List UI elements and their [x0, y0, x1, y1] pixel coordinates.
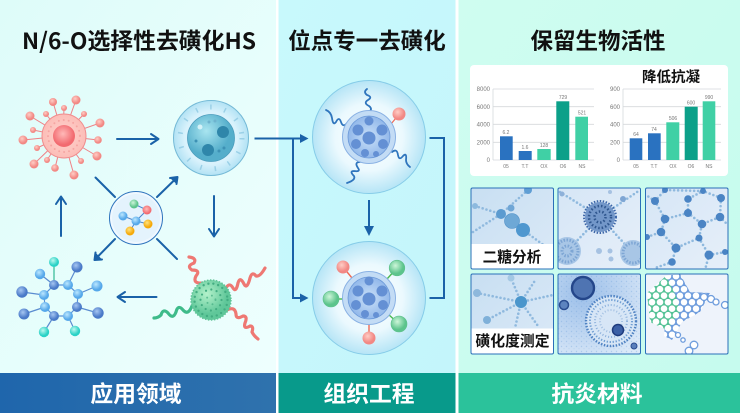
- bar chart: right: 506: [669, 116, 677, 122]
- image tile: bubble network: [646, 274, 728, 355]
- image tile: spiky particles: [553, 188, 646, 269]
- bar chart: left: 521: [578, 110, 586, 116]
- icon: lower cell with ligands: [312, 242, 426, 354]
- arrow: upper to lower cell: [364, 200, 374, 236]
- bar chart: left: OX: [540, 164, 548, 170]
- bar chart: right: O6: [688, 164, 695, 170]
- bar chart: right: 990: [705, 95, 713, 101]
- bar chart: left: 6.2: [503, 130, 510, 136]
- bar chart: left: 8000: [477, 87, 491, 93]
- footer band: anti-inflammatory materials: 抗炎材料: [551, 376, 643, 409]
- arrow: right bracket: [430, 138, 444, 298]
- arrow: ribbon cell to molecule: [118, 292, 156, 302]
- icon: central molecule hub: [110, 192, 162, 244]
- bar chart: left: 128: [540, 143, 548, 149]
- chart title: 降低抗凝: [642, 66, 700, 87]
- bar chart: right: T.T: [651, 164, 657, 170]
- bar chart: right: 400: [610, 122, 621, 128]
- icon: blue stem cell: [174, 100, 248, 176]
- bar chart: left: [477, 87, 594, 170]
- panel: middle site-specific: [278, 0, 456, 373]
- bar chart: right: 900: [610, 87, 621, 93]
- image tile: disaccharide analysis: [471, 186, 554, 269]
- bar chart: left: NS: [579, 164, 586, 170]
- arrow: red cell to stem cell: [117, 134, 158, 144]
- bar chart: right: 600: [610, 105, 621, 111]
- icon: upper cell with chains: [312, 80, 426, 194]
- icon: blue branched molecule: [16, 257, 104, 337]
- arrow: hub to molecule: [94, 239, 115, 260]
- footer band: anti-inflammatory materials: [458, 373, 740, 413]
- bar chart: left: 2000: [477, 140, 491, 146]
- bar chart: right: [610, 87, 721, 170]
- icon: red spiky cell: [18, 96, 104, 180]
- footer band: tissue engineering: [278, 373, 456, 413]
- icon: green virus with ribbons: [154, 257, 265, 339]
- bar chart: left: 0: [487, 158, 491, 164]
- footer band: applications: [0, 373, 276, 413]
- bar chart: left: T.T: [522, 164, 528, 170]
- tile label: 磺化度测定: [476, 330, 550, 351]
- tile label: 二糖分析: [483, 246, 542, 267]
- bar chart: right: 0: [617, 158, 621, 164]
- arrow: link top-left: [96, 178, 115, 197]
- arrow: link bottom-right: [157, 239, 177, 259]
- image tile: hexagonal network: [644, 187, 728, 270]
- bar chart: right: OX: [669, 164, 677, 170]
- image tile: stained vesicles: [558, 274, 640, 354]
- bar chart: right: 600: [687, 100, 695, 106]
- bar chart: left: 1.6: [522, 145, 529, 151]
- arrow: molecule up: [56, 196, 66, 236]
- bar chart: right: 200: [610, 140, 621, 146]
- bar chart: right: 05: [633, 164, 639, 170]
- bar chart: left: 6000: [477, 105, 491, 111]
- arrow: stem cell to middle cells: [254, 134, 308, 302]
- arrow: hub to stem cell: [157, 177, 178, 197]
- bar chart: right: NS: [706, 164, 713, 170]
- footer band: applications: 应用领域: [90, 376, 182, 409]
- panel: right bioactivity: [458, 0, 740, 373]
- footer band: tissue engineering: 组织工程: [323, 376, 415, 409]
- title: left: N/6-O选择性去磺化HS: [22, 24, 256, 56]
- title: right: 保留生物活性: [530, 24, 666, 56]
- arrow: stem cell down: [209, 196, 219, 236]
- title: middle: 位点专一去磺化: [288, 24, 446, 56]
- bar chart: right: 64: [633, 132, 639, 138]
- image tile: sulfation degree: [471, 274, 554, 354]
- bar chart: left: 4000: [477, 122, 491, 128]
- card: bar charts: [470, 65, 728, 176]
- bar chart: left: O6: [560, 164, 567, 170]
- bar chart: right: 74: [651, 127, 657, 133]
- panel: left cell cycle: [0, 0, 276, 373]
- bar chart: left: 05: [503, 164, 509, 170]
- bar chart: left: 729: [559, 95, 567, 101]
